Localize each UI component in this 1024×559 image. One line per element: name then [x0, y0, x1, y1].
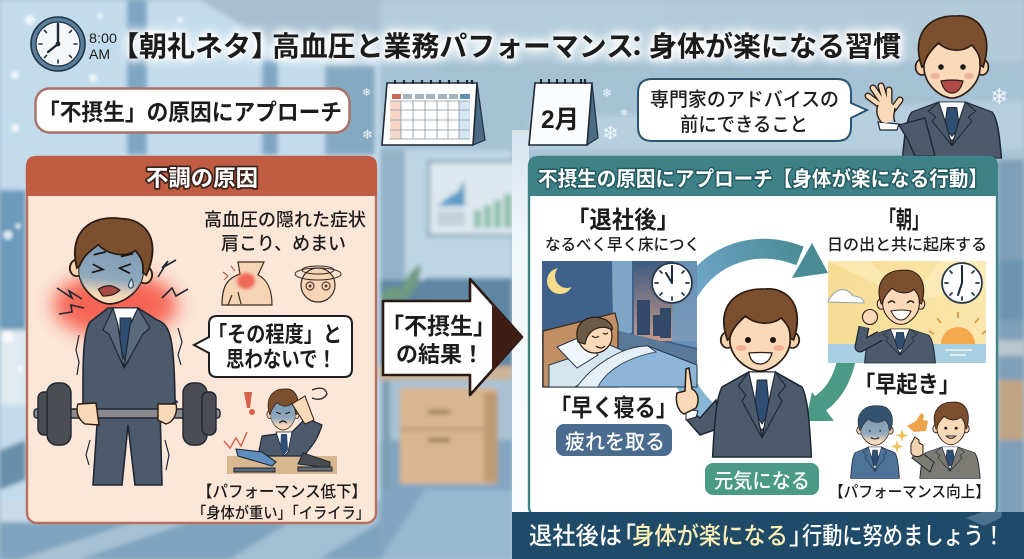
bottom banner: 退社後は [529, 523, 622, 550]
icon: February calendar: 2月 [541, 106, 579, 134]
panel: actions that ease the body [528, 156, 998, 517]
early sleep label: 「早く寝る」 [550, 395, 677, 422]
clock time label [89, 31, 117, 62]
panel: actions that ease the body: なるべく早く床につく [545, 236, 700, 254]
performance up caption: 【パフォーマンス向上】 [829, 483, 990, 501]
badge: energized: 元気になる [714, 470, 810, 493]
bottom banner: 身体が楽になる [632, 523, 788, 550]
speech bubble: advice: 専門家のアドバイスの [650, 89, 839, 111]
white strip left of right panel [512, 130, 529, 512]
bottom banner: 「 [612, 523, 636, 550]
snowflakes left of calendar: ❄ [362, 128, 373, 143]
panel: causes of poor condition: 「身体が重い」「イライラ」 [192, 503, 370, 522]
badge: relieve fatigue [556, 424, 672, 456]
speech bubble: don't dismiss it: 「その程度」と [208, 322, 342, 347]
character: man lifting barbell [34, 214, 220, 485]
badge: energized [705, 463, 819, 495]
character: pointing presenter [676, 289, 811, 457]
icon: dizzy face [295, 266, 341, 302]
panel: actions that ease the body: 日の出と共に起床する [827, 236, 987, 254]
title: 高血圧と業務パフォーマンス [272, 31, 634, 62]
arrow: result of unhealthy habits: 「不摂生」 [381, 313, 496, 339]
performance drop caption: 【パフォーマンス低下】 [197, 483, 367, 501]
scene: waking at sunrise [828, 261, 986, 363]
snowflakes left of calendar: ❄ [362, 86, 371, 99]
character: tired worker at desk [224, 388, 337, 474]
panel header [528, 156, 998, 196]
arrow: cycle arc morning to center [806, 358, 847, 421]
title: ： [623, 31, 651, 62]
snowflakes near speech bubble: ❄ [602, 86, 612, 100]
title: 【朝礼ネタ】 [111, 31, 279, 62]
speech bubble: advice: 前にできること [680, 114, 808, 136]
after-work heading: 「退社後」 [567, 207, 679, 234]
arrow: cycle arc night to morning [676, 243, 828, 421]
snowflakes near speech bubble: ❄ [602, 121, 619, 145]
speech bubble: don't dismiss it [194, 316, 352, 377]
speech bubble: don't dismiss it: 思わないで！ [226, 347, 336, 372]
bottom banner: 」 [789, 523, 813, 550]
characters: performance improvement [851, 402, 980, 478]
title: 身体が楽になる習慣 [649, 30, 901, 62]
subtitle pill: 「不摂生」の原因にアプローチ [38, 99, 342, 125]
panel header [26, 156, 377, 196]
scene: sleeping at night [542, 261, 697, 387]
arrow: result of unhealthy habits [381, 279, 522, 395]
panel: causes of poor condition: 肩こり、めまい [221, 233, 346, 254]
early rising label: 「早起き」 [854, 371, 960, 397]
bottom banner [512, 512, 1024, 559]
clock time label: AM [89, 47, 110, 62]
icon: stiff shoulder [222, 262, 272, 305]
morning heading: 「朝」 [880, 207, 928, 234]
speech bubble: advice [638, 79, 867, 141]
subtitle pill [36, 88, 350, 132]
snowflakes near speech bubble: ❄ [990, 85, 1008, 110]
clock icon [31, 17, 85, 71]
presenter character, waving [868, 16, 1001, 158]
clock time label: 8:00 [89, 31, 117, 46]
panel: actions that ease the body: 不摂生の原因にアプローチ【身体が楽になる行動】 [538, 167, 988, 191]
icon: wall calendar [382, 80, 485, 145]
title [111, 30, 901, 62]
icon: February calendar [529, 79, 598, 145]
panel: causes of poor condition: 不調の原因 [146, 166, 258, 191]
snowflakes near speech bubble: ❄ [620, 108, 628, 119]
arrow: result of unhealthy habits: の結果！ [396, 342, 484, 367]
symptoms heading: 高血圧の隠れた症状 [204, 210, 366, 230]
panel: causes of poor condition [26, 156, 377, 523]
snowflakes near speech bubble [602, 85, 1008, 145]
badge: relieve fatigue: 疲れを取る [565, 431, 665, 454]
snowflakes left of calendar [362, 86, 373, 143]
